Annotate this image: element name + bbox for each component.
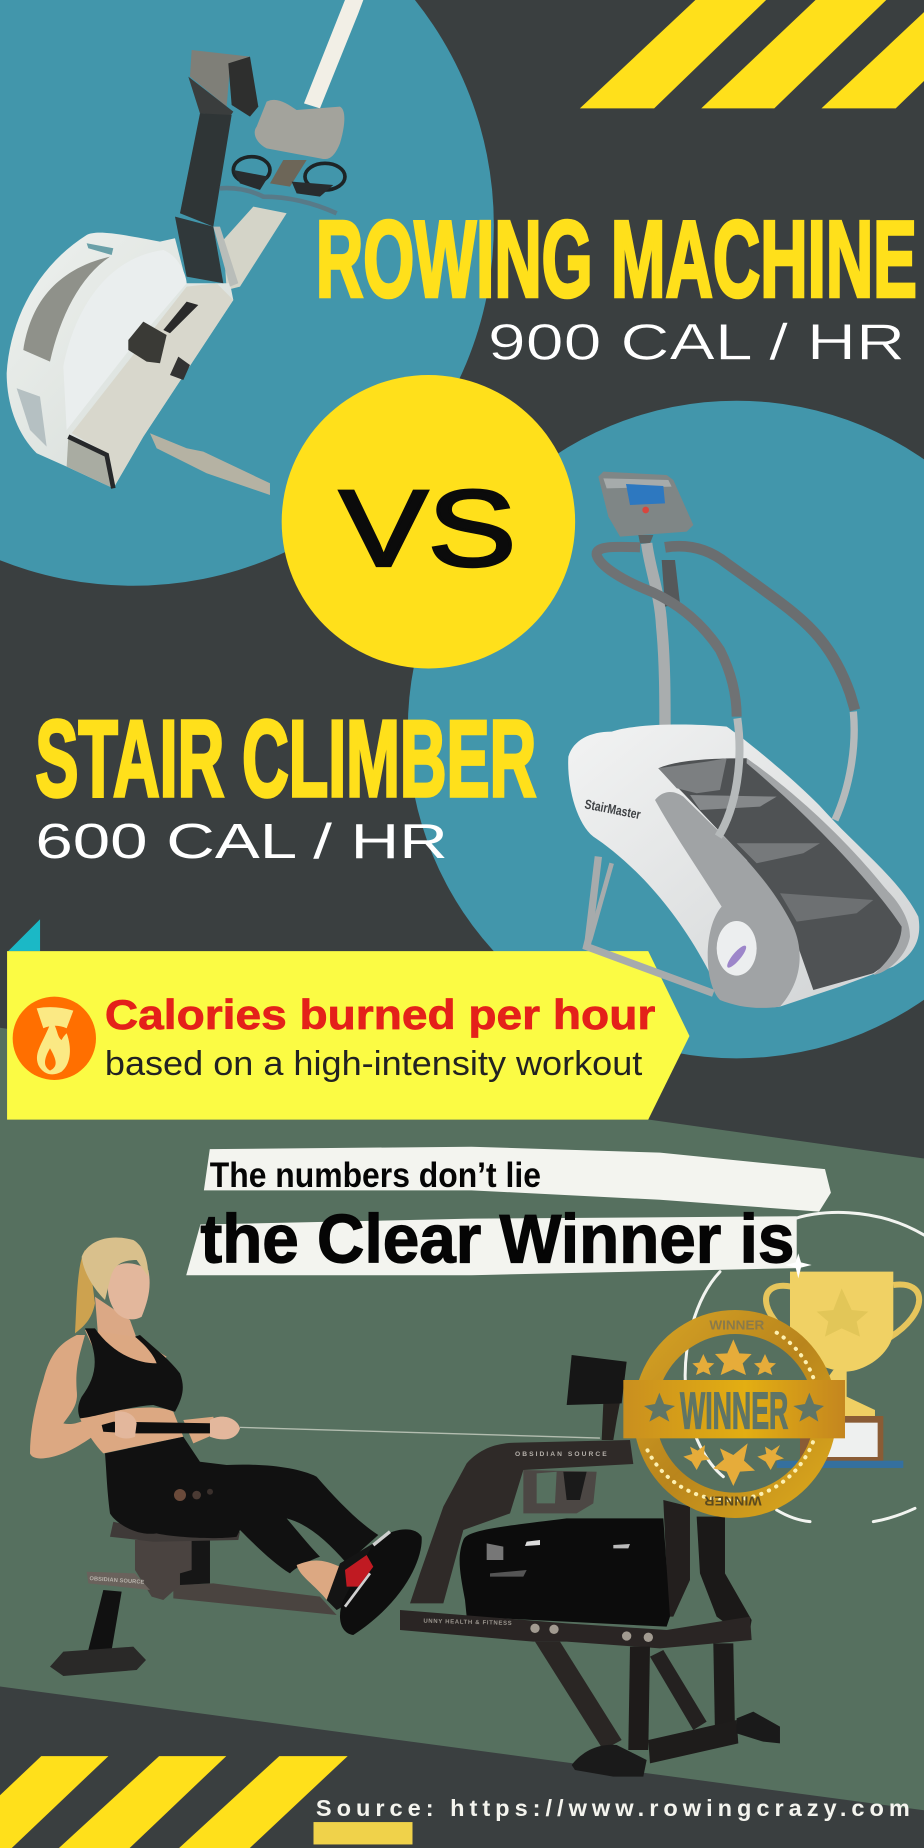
ankle bbox=[297, 1560, 343, 1602]
seat label: OBSIDIAN SOURCE bbox=[89, 1576, 145, 1586]
base rail bbox=[400, 1610, 752, 1648]
seat and front stand bbox=[50, 1522, 337, 1676]
trophy bbox=[766, 1272, 919, 1468]
arm and chest bbox=[30, 1330, 217, 1458]
sparkle bbox=[785, 1253, 812, 1278]
badge ribbon bbox=[623, 1380, 845, 1438]
bracket bbox=[523, 1470, 597, 1513]
uprights bbox=[660, 1500, 752, 1640]
stat: stair climber calories: 600 CAL / HR bbox=[35, 814, 448, 869]
source underline bar bbox=[314, 1822, 412, 1844]
arch frame bbox=[410, 1440, 633, 1603]
machine body bbox=[568, 725, 919, 1008]
source credit: Source: https://www.rowingcrazy.com bbox=[316, 1795, 910, 1821]
text: the clear winner is: the Clear Winner is bbox=[200, 1201, 794, 1277]
footplate and shoe bbox=[327, 1529, 422, 1635]
brand text: StairMaster bbox=[583, 797, 642, 822]
bottom hazard stripes bbox=[0, 1756, 348, 1848]
teal corner tab bbox=[8, 919, 40, 951]
handrail right bbox=[665, 546, 855, 820]
cable bbox=[240, 1427, 600, 1438]
machine brand label: OBSIDIAN SOURCE bbox=[515, 1451, 607, 1458]
ring dots bbox=[645, 1333, 819, 1500]
console bbox=[598, 472, 693, 543]
top-left teal circle bbox=[0, 0, 494, 586]
trophy and winner badge bbox=[623, 1253, 919, 1518]
woman on seat bbox=[30, 1238, 600, 1676]
handrail left bbox=[597, 547, 739, 837]
icon: flame on scale bbox=[13, 997, 96, 1080]
stair climber photo bbox=[568, 472, 919, 1008]
VS badge bbox=[282, 375, 575, 668]
VS badge: VS bbox=[339, 468, 516, 589]
ring word top: WINNER bbox=[709, 1318, 764, 1332]
headline strip bottom bbox=[186, 1216, 797, 1275]
callout banner bbox=[7, 951, 689, 1120]
stat: rowing calories: 900 CAL / HR bbox=[488, 313, 905, 370]
top-right hazard stripes bbox=[580, 0, 924, 108]
midriff bbox=[80, 1407, 183, 1453]
console bbox=[567, 1355, 627, 1440]
main post bbox=[647, 543, 680, 728]
callout title: Calories burned per hour bbox=[105, 992, 655, 1038]
base text: UNNY HEALTH & FITNESS bbox=[423, 1619, 512, 1627]
right teal circle bbox=[408, 401, 924, 1058]
headline strip top bbox=[204, 1147, 831, 1212]
winner trophy ring lines bbox=[685, 1212, 924, 1522]
callout subtitle: based on a high-intensity workout bbox=[105, 1045, 643, 1083]
hands bbox=[115, 1411, 240, 1439]
heading: stair climber: STAIR CLIMBER bbox=[35, 698, 536, 819]
ring word bottom: WINNER bbox=[704, 1494, 762, 1508]
leggings bbox=[105, 1437, 378, 1573]
handle bbox=[102, 1422, 220, 1433]
rowing machine photo (side view, upright) bbox=[7, 0, 363, 495]
badge ring bbox=[633, 1310, 837, 1518]
frame legs bbox=[587, 857, 713, 993]
legs and wheels bbox=[535, 1642, 780, 1777]
green lower panel bbox=[0, 1028, 924, 1810]
water rower machine bbox=[400, 1355, 780, 1777]
ponytail and head bbox=[75, 1238, 160, 1360]
ribbon word: WINNER bbox=[680, 1381, 788, 1439]
ribbon stars bbox=[644, 1393, 824, 1422]
water tank bbox=[460, 1518, 670, 1627]
text: the numbers don't lie: The numbers don’t lie bbox=[210, 1156, 541, 1195]
sports top bbox=[78, 1328, 183, 1418]
badge stars bbox=[683, 1339, 784, 1486]
